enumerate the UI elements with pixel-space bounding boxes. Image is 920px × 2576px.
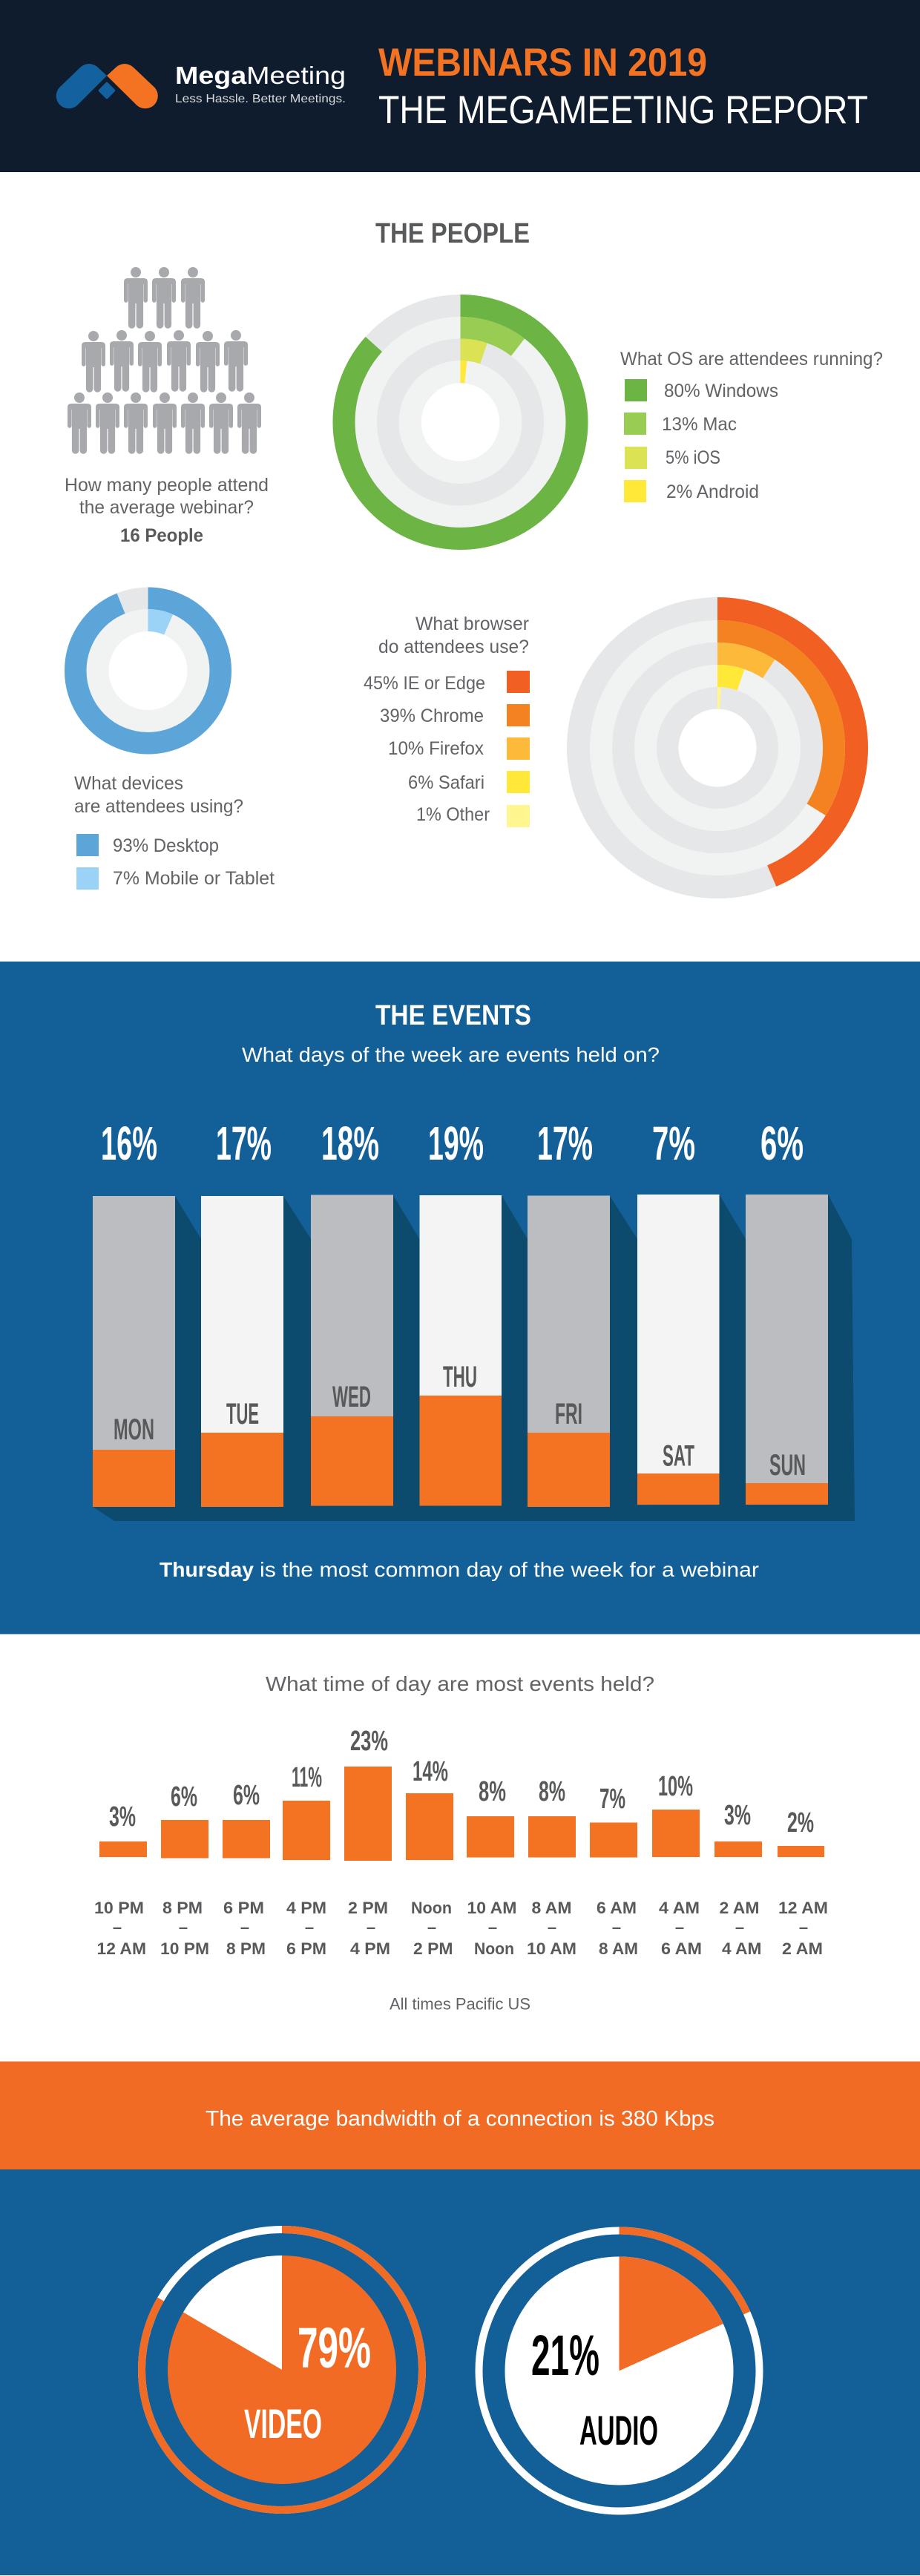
time range labels: 8 AM — [531, 1899, 571, 1917]
time range labels: 8 PM — [226, 1939, 266, 1958]
bar value labels: 8% — [539, 1776, 565, 1807]
bar value labels: 3% — [109, 1801, 136, 1833]
time range labels: – — [675, 1918, 684, 1936]
logo tagline: Less Hassle. Better Meetings. — [175, 93, 346, 105]
legend: devices: What devices — [74, 773, 183, 794]
text: average attendance — [65, 475, 269, 546]
time range labels: 6 PM — [286, 1939, 326, 1958]
time range labels: – — [179, 1918, 188, 1936]
legend: devices: 93% Desktop — [113, 835, 219, 856]
chart: video: 79% — [298, 2316, 371, 2380]
time range labels: 10 AM — [467, 1899, 516, 1917]
time range labels: 4 PM — [350, 1939, 390, 1958]
bar value labels: 11% — [292, 1762, 322, 1793]
chart: audio — [479, 2230, 760, 2511]
bar value labels: 8% — [479, 1776, 506, 1807]
time range labels: – — [548, 1918, 556, 1936]
icon: sixteen people — [68, 267, 261, 454]
bar: Tuesday — [201, 1196, 283, 1507]
bar value labels: 6% — [233, 1780, 260, 1811]
bar: Friday: FRI — [555, 1398, 582, 1430]
bar: Sunday — [746, 1195, 828, 1505]
time range labels: – — [367, 1918, 375, 1936]
callout: Thursday: is the most common day of the week for a webinar — [260, 1558, 759, 1581]
time range labels: 10 PM — [160, 1939, 209, 1958]
legend: operating systems — [620, 349, 883, 502]
time range labels: – — [488, 1918, 497, 1936]
chart: audio: AUDIO — [579, 2407, 658, 2454]
time range labels: 12 AM — [778, 1899, 828, 1917]
chart: audio: 21% — [531, 2324, 599, 2388]
text: average attendance: the average webinar? — [79, 497, 254, 518]
legend: operating systems: What OS are attendees running? — [620, 349, 883, 369]
percent labels: 18% — [321, 1117, 379, 1170]
bar: Monday — [93, 1196, 175, 1507]
time range labels: 4 AM — [722, 1939, 761, 1958]
time range labels: 4 AM — [659, 1899, 700, 1917]
time range labels: Noon — [411, 1899, 452, 1917]
chart: video — [142, 2230, 422, 2510]
panel: time of day — [94, 1672, 828, 2014]
time range labels: 2 AM — [720, 1899, 760, 1917]
bar: Friday — [528, 1196, 610, 1507]
percent labels: 6% — [760, 1117, 804, 1170]
time range labels — [94, 1899, 828, 1958]
time range labels: – — [612, 1918, 621, 1936]
bar value labels — [109, 1726, 814, 1839]
time range labels: – — [113, 1918, 122, 1936]
time range labels: 2 PM — [413, 1939, 453, 1958]
bar value labels: 14% — [413, 1756, 448, 1787]
legend: devices — [74, 773, 275, 890]
percent labels: 19% — [428, 1117, 484, 1170]
bar value labels: 23% — [350, 1726, 388, 1757]
title line 1: WEBINARS IN 2019 — [378, 41, 707, 85]
banner: bandwidth — [0, 2061, 920, 2169]
legend: operating systems: 80% Windows — [664, 381, 778, 401]
bar: Saturday — [637, 1195, 720, 1505]
bar: Thursday — [420, 1195, 502, 1506]
time range labels: 12 AM — [96, 1939, 146, 1958]
bar: Tuesday: TUE — [226, 1398, 259, 1430]
heading: time of day question: What time of day are most events held? — [266, 1672, 654, 1695]
legend: operating systems: 2% Android — [666, 482, 759, 502]
legend: browsers: 45% IE or Edge — [364, 673, 485, 694]
heading: the people: THE PEOPLE — [375, 218, 530, 249]
chart: operating systems — [332, 295, 588, 550]
time range labels: 2 AM — [782, 1939, 823, 1958]
icon: logo mark — [56, 64, 158, 108]
bar chart: time of day — [99, 1767, 824, 1861]
time range labels: – — [305, 1918, 314, 1936]
bar: Saturday: SAT — [663, 1439, 694, 1472]
time range labels: 2 PM — [348, 1899, 388, 1917]
time range labels: 10 PM — [94, 1899, 144, 1917]
bar: Thursday: THU — [443, 1361, 477, 1393]
time range labels: Noon — [474, 1939, 514, 1958]
time range labels: 8 AM — [599, 1939, 638, 1958]
bar value labels: 2% — [787, 1807, 814, 1839]
time range labels: – — [427, 1918, 436, 1936]
logo — [56, 62, 346, 108]
bar value labels: 7% — [599, 1784, 625, 1815]
time range labels: 6 PM — [223, 1899, 264, 1917]
percent labels: 17% — [537, 1117, 593, 1170]
legend: devices: 7% Mobile or Tablet — [113, 868, 275, 889]
time range labels: – — [240, 1918, 249, 1936]
percent labels: 17% — [216, 1117, 272, 1170]
time range labels: 8 PM — [162, 1899, 203, 1917]
percent labels: 16% — [101, 1117, 157, 1170]
bar value labels: 10% — [658, 1771, 693, 1802]
bar value labels: 6% — [171, 1781, 197, 1813]
text: average attendance: 16 People — [120, 525, 203, 546]
time range labels: 6 AM — [661, 1939, 702, 1958]
footnote: time zone: All times Pacific US — [390, 1994, 530, 2014]
legend: browsers: 39% Chrome — [380, 706, 484, 726]
text: average attendance: How many people attend — [65, 475, 269, 496]
legend: browsers: 6% Safari — [408, 772, 484, 793]
time range labels: 10 AM — [527, 1939, 576, 1958]
time range labels: – — [735, 1918, 744, 1936]
percent labels: 7% — [652, 1117, 695, 1170]
time range labels: – — [799, 1918, 808, 1936]
legend: browsers — [364, 614, 530, 827]
logo wordmark: Mega Meeting — [175, 62, 346, 89]
percent labels — [101, 1117, 804, 1170]
heading: the events: THE EVENTS — [375, 1000, 531, 1031]
legend: browsers: do attendees use? — [378, 637, 529, 657]
bar: Wednesday: WED — [332, 1381, 371, 1413]
bar: Wednesday — [311, 1195, 393, 1506]
chart: devices — [65, 588, 231, 754]
callout: Thursday: Thursday — [160, 1558, 254, 1581]
time range labels: 4 PM — [286, 1899, 326, 1917]
subheading: days of week question: What days of the week are events held on? — [242, 1043, 660, 1066]
banner: bandwidth: The average bandwidth of a connection is 380 Kbps — [206, 2107, 714, 2131]
bar value labels: 3% — [724, 1800, 751, 1831]
chart: video: VIDEO — [244, 2400, 322, 2447]
time range labels: 6 AM — [597, 1899, 637, 1917]
legend: operating systems: 5% iOS — [666, 447, 720, 468]
bar: Monday: MON — [114, 1413, 154, 1446]
legend: browsers: 1% Other — [416, 804, 490, 825]
legend: browsers: 10% Firefox — [388, 738, 484, 759]
chart: browsers — [567, 597, 868, 898]
legend: browsers: What browser — [415, 614, 529, 634]
panel: the people — [65, 218, 883, 898]
panel: video and audio share — [0, 2169, 920, 2575]
legend: operating systems: 13% Mac — [662, 414, 737, 435]
panel: the events — [0, 962, 920, 1634]
bar shadow — [93, 1195, 855, 1521]
legend: devices: are attendees using? — [74, 796, 243, 817]
bar: Sunday: SUN — [769, 1449, 806, 1482]
header banner — [0, 0, 920, 172]
